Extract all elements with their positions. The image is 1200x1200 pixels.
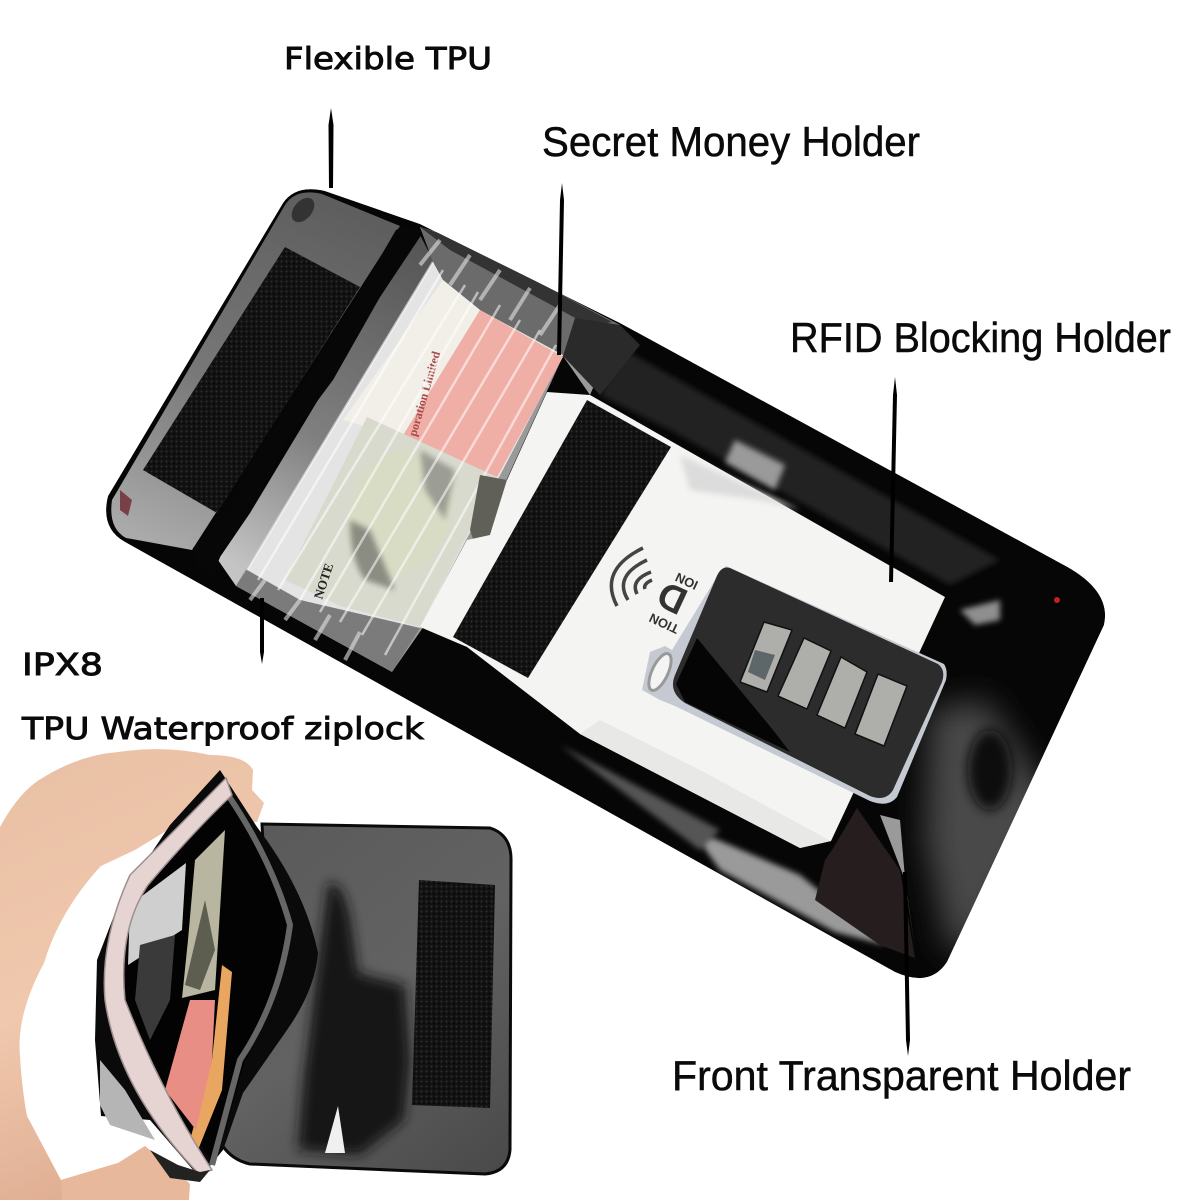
dollar note text: NOTE [311,561,336,601]
velcro strip: flap [143,247,360,513]
banknote text: poration Limited [405,349,443,438]
cash: orange and red notes [190,965,232,1150]
fob gloss [676,638,790,752]
RFID wave icon [611,548,652,606]
callout: RFID Blocking Holder [790,314,1171,582]
velcro strip: center [453,400,671,678]
white notes [343,280,480,437]
dark right end of top strip [563,318,640,395]
fob loop [647,652,673,692]
callout: IPX8 TPU Waterproof ziplock: IPX8 [22,648,103,683]
wallet black outer wedge [95,770,318,1178]
callout: RFID Blocking Holder: RFID Blocking Holder [790,314,1171,361]
fob body [673,567,943,798]
thumb over wallet [61,1146,190,1200]
cash: dollar [182,830,225,998]
wallet black interior [125,790,290,1165]
key fob [642,566,947,804]
callout: Secret Money Holder [542,118,920,355]
flexible TPU flap [111,192,400,550]
zipper ridges [247,262,556,655]
card text TION lower: TION [647,610,681,637]
banknote: red [402,310,563,477]
wallet gray ridge [212,795,290,1165]
wallet silver lower side [100,1060,155,1140]
callout: IPX8 TPU Waterproof ziplock: TPU Waterproof ziplock [21,712,425,747]
card text ION upper: ION [673,570,700,593]
gold chip card [470,475,507,539]
banknote: dollar [285,417,497,627]
lower wallet photo [0,749,511,1200]
key fob buttons [740,622,907,746]
right side sheen [925,700,1050,955]
wallet bottom tip [150,1150,210,1182]
lower glossy band and dark triangle [690,828,885,945]
callout: Secret Money Holder: Secret Money Holder [542,118,920,165]
callout: Flexible TPU: Flexible TPU [284,42,492,77]
main pouch: black TPU body [106,189,1105,978]
wallet back panel [222,824,511,1174]
wallet pink zip edge [104,778,232,1174]
bottom zip strip [236,570,420,672]
card logo D: D [651,572,694,622]
clear pocket: money compartment [236,227,620,672]
flap spot [120,490,132,516]
top glossy strip [600,350,1000,585]
callout: Front Transparent Holder: Front Transparent Holder [672,1052,1131,1099]
callout: Front Transparent Holder [672,872,1131,1099]
black ziplock band [193,227,422,578]
callout: IPX8 TPU Waterproof ziplock [21,598,425,747]
white RFID card [420,392,945,848]
wallet reflection [298,883,410,1155]
top zip strip [420,227,620,362]
velcro strip: wallet [412,880,495,1108]
callout: Flexible TPU [284,42,492,188]
silver reflection [128,863,186,965]
gray ziplock band [218,235,434,586]
fob clear sleeve [642,566,947,804]
hand [0,749,264,1200]
